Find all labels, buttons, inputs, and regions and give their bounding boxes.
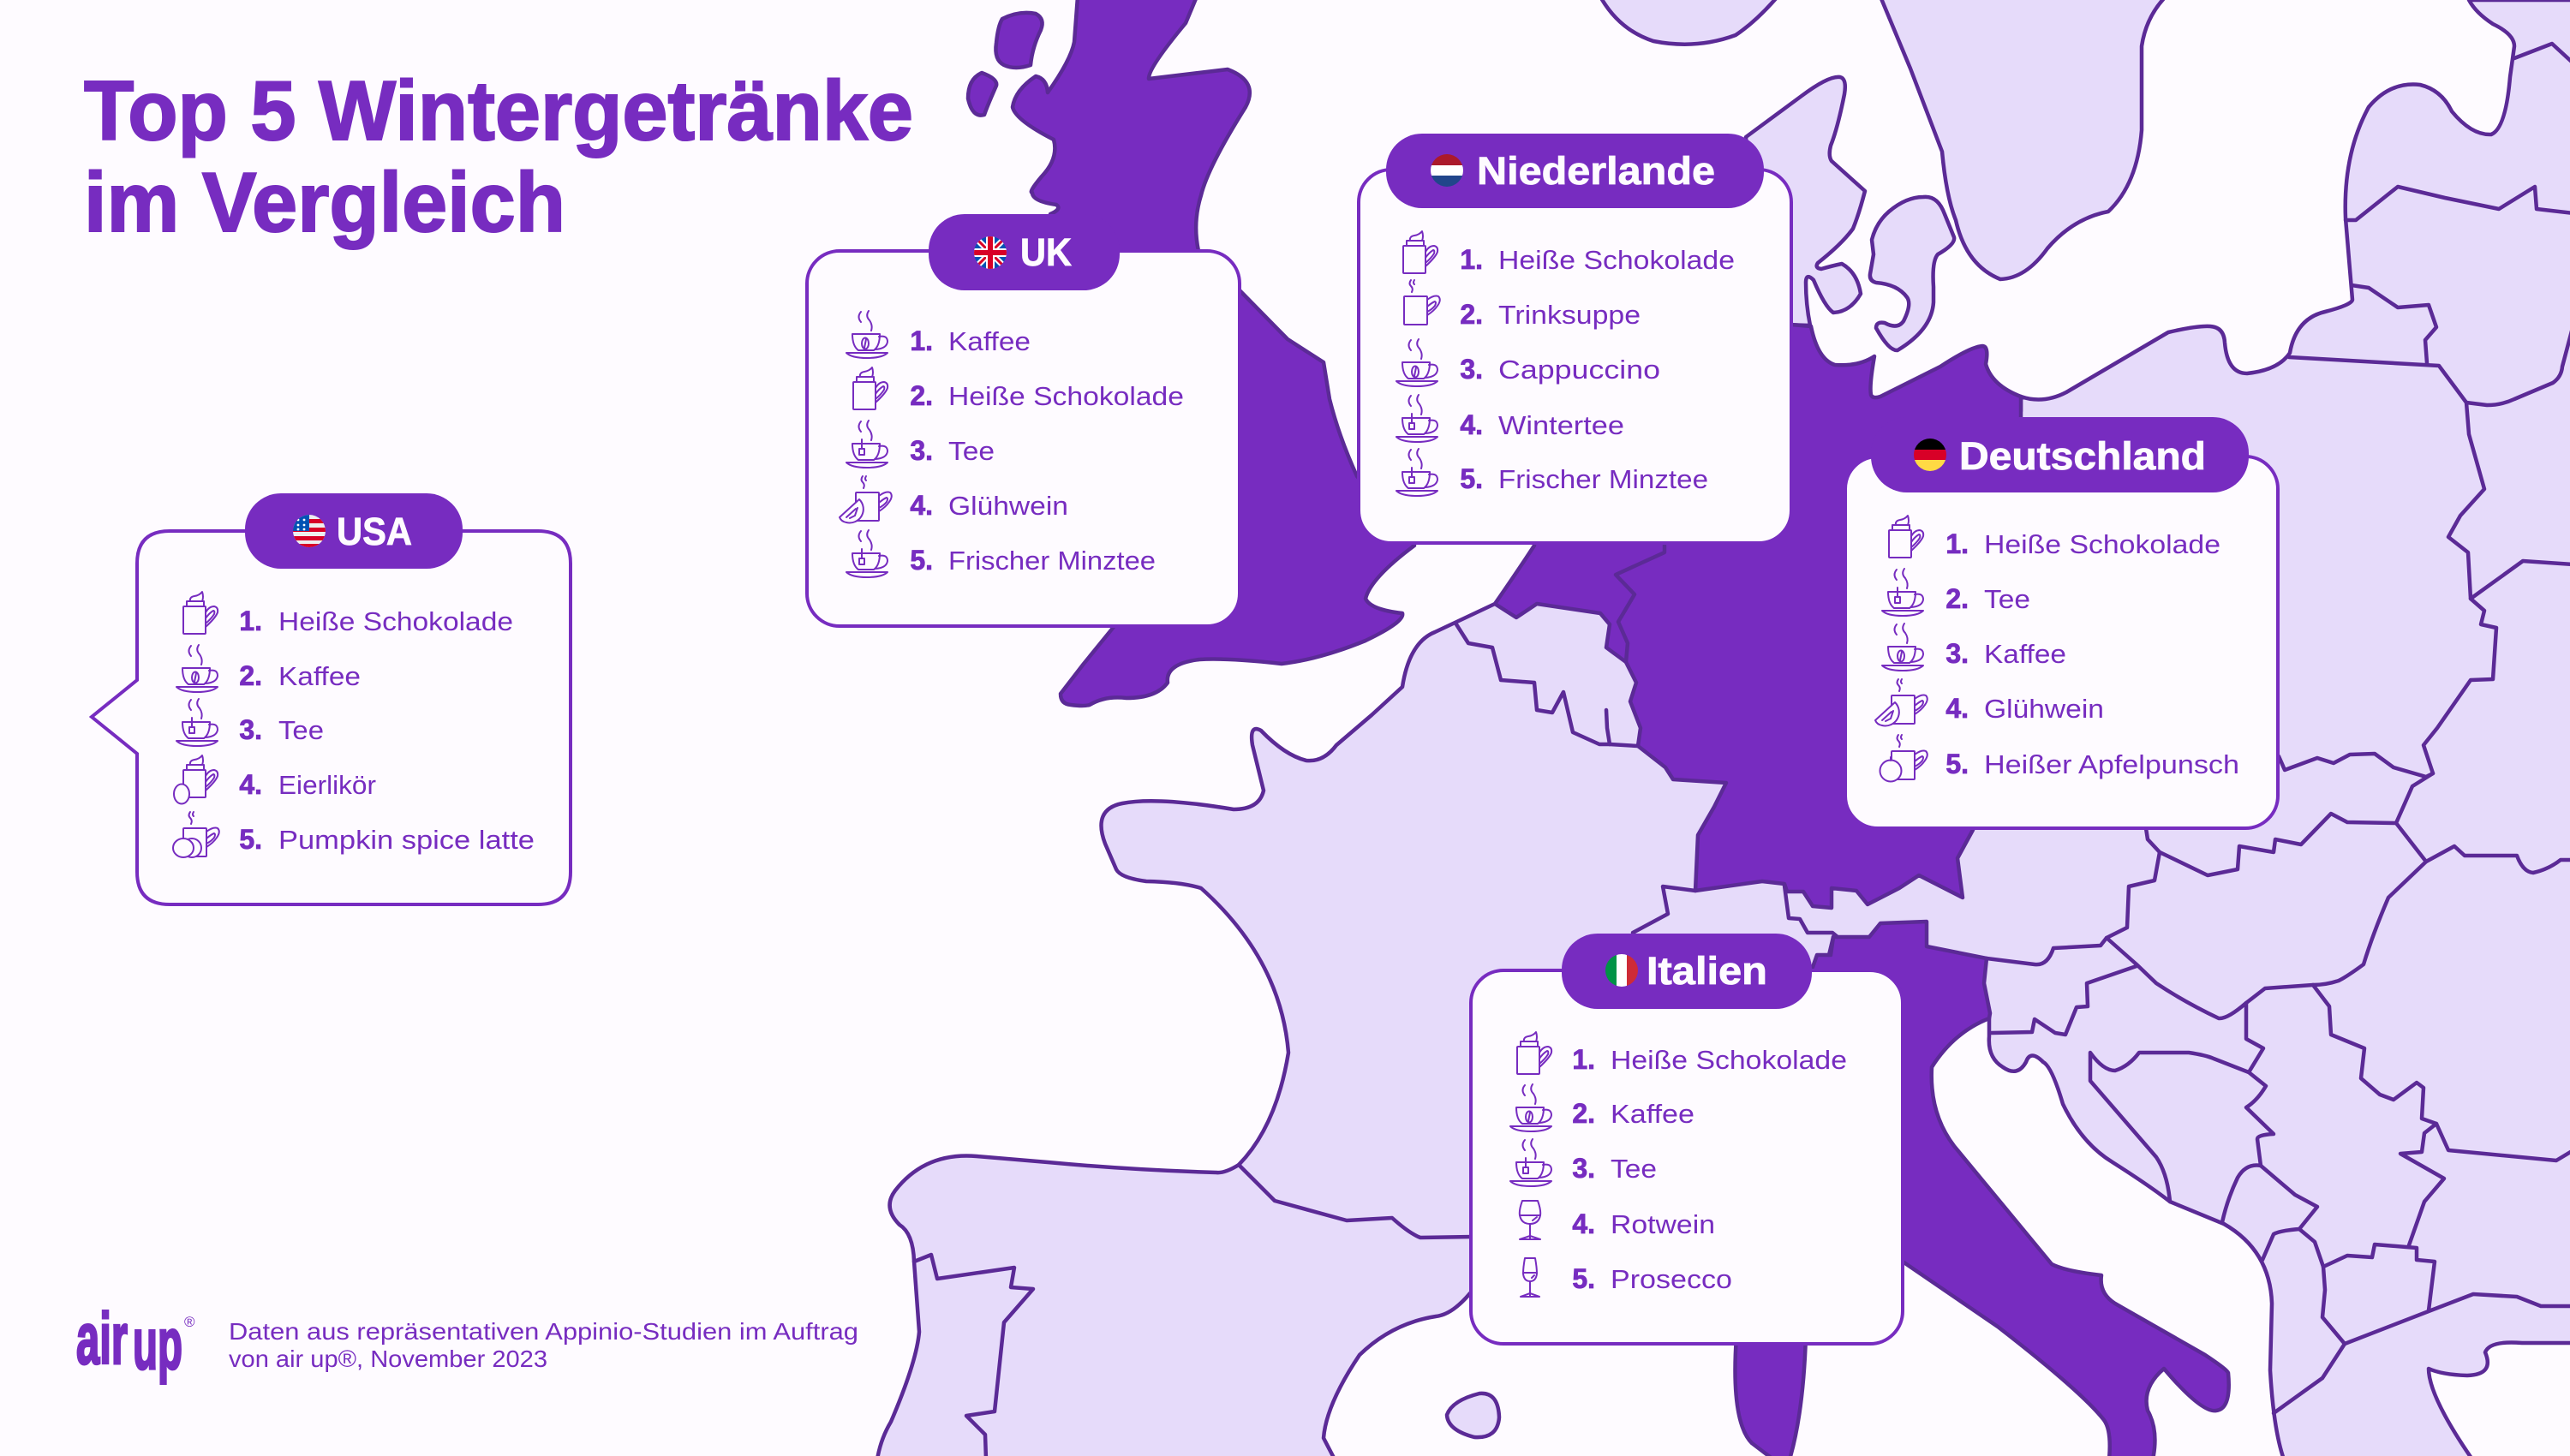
rank: 2. (239, 660, 262, 691)
rank: 3. (1572, 1153, 1595, 1184)
drink: Heiße Schokolade (948, 381, 1184, 411)
card (1845, 456, 2278, 828)
heading pill (929, 214, 1120, 290)
rank: 1. (239, 606, 262, 636)
drink: Pumpkin spice latte (278, 825, 535, 855)
heading pill (1871, 417, 2249, 492)
map: Balearic island (1447, 1393, 1499, 1437)
list item 5 (173, 812, 535, 857)
icon: tea (176, 699, 218, 746)
panel: UK (807, 214, 1240, 626)
icon: hot chocolate (183, 592, 218, 634)
map: UK highlighted (1013, 0, 1414, 706)
list item 1 (1517, 1032, 1847, 1075)
drink: Heiße Schokolade (1611, 1045, 1847, 1075)
drink: Tee (1984, 584, 2030, 614)
icon: mulled wine (840, 476, 892, 522)
heading: Niederlande (1477, 149, 1715, 193)
rank: 1. (910, 325, 933, 356)
panel: Niederlande (1359, 134, 1791, 543)
rank: 5. (1572, 1263, 1595, 1294)
map: Norway (1600, 0, 1778, 45)
logo: air up (76, 1298, 195, 1384)
icon: eggnog (174, 755, 218, 803)
footnote: data source (229, 1318, 858, 1372)
rank: 5. (910, 545, 933, 576)
drink: Heißer Apfelpunsch (1984, 749, 2239, 779)
icon: mulled wine (1875, 679, 1928, 725)
icon: hot chocolate (1517, 1032, 1551, 1074)
flag: Italy (1605, 954, 1638, 987)
list item 3 (1882, 624, 2066, 671)
drink: Frischer Minztee (1498, 464, 1708, 494)
title line 2: im Vergleich (84, 155, 565, 249)
icon: tea (1882, 569, 1923, 616)
list item 1 (1889, 516, 2220, 559)
drink: Wintertee (1498, 410, 1624, 440)
wordmark up: up (133, 1304, 182, 1384)
icon: cappuccino (1396, 339, 1437, 386)
icon: red wine glass (1520, 1201, 1540, 1239)
icon: hot apple punch (1880, 735, 1928, 781)
map: UK western island (968, 73, 996, 116)
map of Europe (877, 0, 2570, 1456)
map: Sweden (1880, 0, 2166, 279)
heading: USA (337, 510, 412, 553)
icon: coffee (1882, 624, 1923, 671)
registered mark: ® (184, 1314, 195, 1330)
drink: Prosecco (1611, 1264, 1732, 1294)
list item 2 (1882, 569, 2030, 616)
drink: Kaffee (1611, 1099, 1694, 1129)
list item 5 (1880, 735, 2239, 781)
icon: tea (846, 421, 888, 468)
list item 4 (174, 755, 376, 803)
drink: Glühwein (1984, 694, 2104, 724)
list item 1 (846, 311, 1031, 358)
rank: 2. (1460, 299, 1483, 330)
rank: 2. (1945, 583, 1969, 614)
drink: Rotwein (1611, 1209, 1715, 1239)
rank: 1. (1572, 1044, 1595, 1075)
panel: Deutschland (1845, 417, 2278, 828)
wordmark air: air (76, 1298, 128, 1379)
list item 4 (1396, 395, 1624, 442)
icon: prosecco glass (1521, 1258, 1539, 1297)
map: UK northern island (995, 13, 1043, 68)
drink: Eierlikör (278, 770, 376, 800)
rank: 4. (910, 490, 933, 521)
rank: 2. (910, 380, 933, 411)
drink: Heiße Schokolade (1498, 245, 1735, 275)
map: Italy highlighted (1713, 922, 2229, 1456)
flag: Germany (1914, 439, 1946, 471)
drink: Tee (278, 715, 324, 745)
icon: coffee (176, 645, 218, 692)
rank: 3. (1460, 354, 1483, 385)
rank: 4. (239, 769, 262, 800)
heading: Deutschland (1959, 434, 2206, 478)
footnote line 2: von air up®, November 2023 (229, 1346, 547, 1372)
drink: Kaffee (1984, 639, 2066, 669)
rank: 4. (1460, 409, 1483, 440)
drink: Heiße Schokolade (1984, 529, 2220, 559)
heading pill (1562, 934, 1812, 1009)
heading pill (245, 493, 463, 569)
card (1359, 170, 1791, 543)
map: Germany and Netherlands highlighted (1495, 325, 2021, 908)
list item 5 (846, 530, 1156, 577)
card (1471, 970, 1903, 1344)
list item 2 (176, 645, 361, 692)
rank: 4. (1945, 693, 1969, 724)
map: Sardinia highlighted (1735, 1336, 1806, 1456)
title line 1: Top 5 Wintergetränke (84, 63, 913, 158)
flag: USA (293, 515, 326, 548)
list item 2 (1510, 1084, 1694, 1131)
flag: Netherlands (1431, 154, 1463, 187)
map: Denmark Zealand (1870, 197, 1954, 350)
drink: Kaffee (948, 326, 1031, 356)
list item 3 (176, 699, 324, 746)
drink: Cappuccino (1498, 355, 1660, 385)
list item 5 (1521, 1258, 1732, 1297)
icon: hot chocolate (853, 367, 888, 409)
drink: Frischer Minztee (948, 546, 1156, 576)
map: continental Europe land mass (877, 0, 2570, 1456)
drink: Tee (1611, 1154, 1657, 1184)
rank: 3. (1945, 638, 1969, 669)
rank: 3. (910, 435, 933, 466)
flag: UK (974, 236, 1007, 269)
heading: Italien (1647, 949, 1767, 993)
heading: UK (1020, 230, 1072, 274)
icon: mint tea (846, 530, 888, 577)
panel: Italien (1471, 934, 1903, 1344)
drink: Tee (948, 436, 995, 466)
list item 4 (1875, 679, 2104, 725)
list item 5 (1396, 449, 1708, 496)
rank: 2. (1572, 1098, 1595, 1129)
card with pointer (92, 531, 571, 904)
panel: USA (92, 493, 571, 904)
icon: coffee (846, 311, 888, 358)
list item 4 (840, 476, 1068, 522)
list item 2 (853, 367, 1184, 411)
list item 4 (1520, 1201, 1715, 1239)
drink: Glühwein (948, 491, 1068, 521)
drink: Trinksuppe (1498, 300, 1641, 330)
list item 1 (183, 592, 513, 636)
icon: hot chocolate (1403, 231, 1437, 273)
drink: Kaffee (278, 661, 361, 691)
map: Denmark Jutland (1746, 77, 1865, 325)
icon: pumpkin spice latte (173, 812, 219, 857)
rank: 1. (1945, 528, 1969, 559)
title (84, 63, 913, 249)
list item 1 (1403, 231, 1735, 275)
rank: 5. (1460, 463, 1483, 494)
rank: 5. (1945, 749, 1969, 779)
icon: tea (1510, 1139, 1551, 1186)
rank: 5. (239, 824, 262, 855)
icon: coffee (1510, 1084, 1551, 1131)
map: country borders (914, 44, 2570, 1456)
rank: 4. (1572, 1208, 1595, 1239)
icon: hot chocolate (1889, 516, 1923, 558)
list item 3 (846, 421, 995, 468)
icon: drinking soup (1404, 280, 1440, 325)
drink: Heiße Schokolade (278, 606, 513, 636)
list item 2 (1404, 280, 1641, 330)
icon: winter tea (1396, 395, 1437, 442)
rank: 3. (239, 714, 262, 745)
footnote line 1: Daten aus repräsentativen Appinio-Studien im Auftrag (229, 1318, 858, 1345)
list item 3 (1396, 339, 1660, 386)
card (807, 251, 1240, 626)
rank: 1. (1460, 244, 1483, 275)
heading pill (1386, 134, 1764, 208)
icon: mint tea (1396, 449, 1437, 496)
list item 3 (1510, 1139, 1657, 1186)
